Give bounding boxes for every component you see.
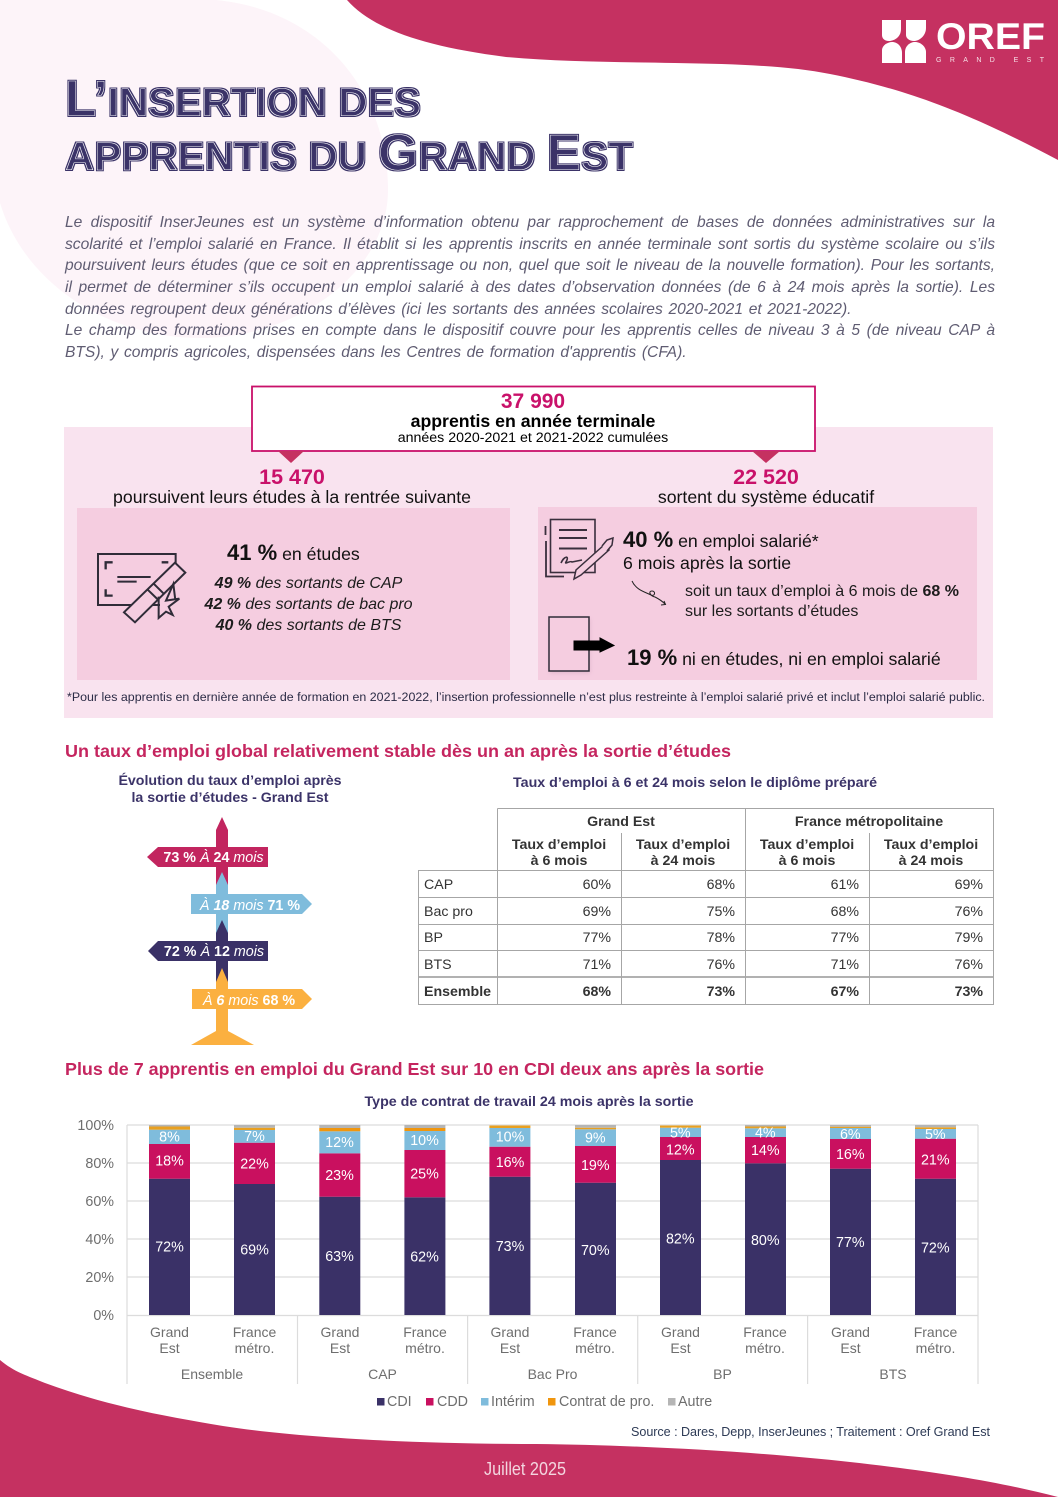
table row: CAP: 60% [583, 877, 611, 893]
intro text block: scolarité et l’emploi salarié en France. Il établit si les apprentis inscrits en année terminale sont sortis du système scolaire ou s’ils [65, 236, 995, 253]
y axis labels: 40% [85, 1232, 114, 1248]
y axis labels: 100% [77, 1118, 114, 1134]
title: L’INSERTION DES [65, 70, 421, 127]
bar: Bac Pro Grand Est [489, 1126, 530, 1315]
callout: total apprentices: 37 990 [501, 390, 565, 413]
y axis labels [77, 1118, 114, 1324]
chart title: signpost: Évolution du taux d’emploi après [118, 772, 342, 789]
bar: BP Grand Est [660, 1126, 701, 1315]
bar: CAP France: 62% [410, 1250, 439, 1266]
table title: Taux d’emploi à 6 et 24 mois selon le diplôme préparé [513, 774, 877, 790]
intro text block: il permet de déterminer s’ils occupent un emploi salarié à des dates d’observation données (de 6 à 24 mois après la sortie). Les [65, 279, 995, 296]
sign labels: À 18 mois 71 % [199, 897, 300, 914]
table row: BTS: 71% [583, 957, 611, 973]
chart title: signpost [118, 772, 342, 806]
x axis labels: areas: Grand [831, 1324, 870, 1340]
table: employment rate by diploma [418, 808, 994, 1004]
bar: CAP Grand Est [319, 1125, 360, 1315]
x axis labels: areas: France [914, 1324, 957, 1340]
x axis labels: areas: Grand [150, 1324, 189, 1340]
table row: BP: 77% [583, 930, 611, 946]
sign labels: 73 % À 24 mois [163, 849, 264, 866]
bar: CAP France [404, 1125, 445, 1315]
bar: Ensemble France: 7% [244, 1129, 265, 1145]
bar: BP Grand Est: 12% [666, 1142, 695, 1158]
table row: Ensemble: Ensemble [424, 984, 491, 1000]
x axis labels: areas: Grand [321, 1324, 359, 1340]
panel: key figures [64, 386, 993, 718]
table header: à 6 mois [779, 853, 835, 869]
table row: Bac pro: 69% [583, 904, 611, 920]
legend: CDD [437, 1394, 468, 1410]
arrow: curved doodle [632, 581, 666, 605]
figure: 22 520 [658, 465, 874, 507]
bar: Ensemble Grand Est: 72% [155, 1240, 184, 1256]
x axis labels: diploma groups [181, 1366, 907, 1382]
table row: Bac pro [424, 904, 983, 920]
bar: Bac Pro France: 19% [581, 1158, 610, 1174]
table row: BTS: 76% [707, 957, 735, 973]
legend [377, 1394, 712, 1410]
bar: CAP Grand Est: 12% [325, 1135, 354, 1151]
table header: Taux d’emploi [884, 837, 978, 853]
x axis labels: diploma groups: Ensemble [181, 1366, 243, 1382]
figure: 15 470: poursuivent leurs études à la rentrée suivante [113, 487, 471, 507]
bar: CAP France: 10% [410, 1133, 439, 1149]
table row: BP: 77% [831, 930, 859, 946]
y axis labels: 60% [85, 1194, 114, 1210]
y axis labels: 20% [85, 1270, 114, 1286]
footnote: *Pour les apprentis en dernière année de formation en 2021-2022, l’insertion professionnelle n’est plus restreinte à l’emploi salarié privé et inclut l’emploi salarié public. [67, 690, 985, 704]
x axis labels: areas: France [233, 1324, 276, 1340]
heading: stable employment rate: Un taux d’emploi global relativement stable dès un an après la sortie d’études [65, 741, 731, 761]
table row: Bac pro: 76% [955, 904, 983, 920]
pole: 6 months [191, 968, 312, 1045]
figure: 22 520: 22 520 [733, 465, 799, 489]
text: employment rate note: sur les sortants d’études [685, 603, 858, 620]
panel background [64, 427, 993, 718]
table header [512, 814, 978, 869]
y axis labels: 80% [85, 1156, 114, 1172]
bar: Bac Pro France [575, 1125, 616, 1315]
table row: BP: BP [424, 930, 443, 946]
x axis labels: areas: Est [159, 1340, 180, 1356]
x axis labels: areas: métro. [235, 1340, 274, 1356]
bar: CAP Grand Est: 23% [325, 1168, 354, 1184]
bar: Bac Pro Grand Est: 73% [496, 1239, 525, 1255]
bar: BTS Grand Est [830, 1125, 871, 1315]
x axis labels: areas: Grand [661, 1324, 700, 1340]
text: employment rate note: soit un taux d’emploi à 6 mois de 68 % [685, 583, 959, 600]
icon: diploma [98, 554, 185, 622]
bar: BTS France: 21% [921, 1152, 950, 1168]
panel: continuing studies [77, 508, 510, 680]
table row: BTS [424, 957, 983, 973]
table header: à 6 mois [531, 853, 587, 869]
figure: 15 470: 15 470 [259, 465, 325, 489]
legend: Intérim [491, 1394, 535, 1410]
x axis labels: areas: Grand [491, 1324, 529, 1340]
table row: Ensemble: 73% [955, 984, 983, 1000]
background shape: top right crimson wave [347, 0, 1058, 160]
sign labels: À 6 mois 68 % [202, 992, 295, 1009]
table header: à 24 mois [651, 853, 715, 869]
intro text block: Le champ des formations prises en compte dans le dispositif couvre pour les apprentis celles de niveau 3 à 5 (de niveau CAP à [65, 322, 995, 339]
table header: Taux d’emploi [760, 837, 854, 853]
sign labels [163, 849, 300, 1009]
table row: BTS: 76% [955, 957, 983, 973]
table row: BP [424, 930, 983, 946]
table row: CAP: 68% [707, 877, 735, 893]
table header: Grand Est [587, 814, 655, 830]
table row: Bac pro: Bac pro [424, 904, 473, 920]
text: breakdown by diploma: 49 % des sortants de CAP [214, 575, 403, 592]
pole: 12 months [148, 920, 268, 982]
text: breakdown by diploma: 40 % des sortants de BTS [215, 617, 402, 634]
x axis labels: areas: métro. [745, 1340, 785, 1356]
x axis labels: areas: France [743, 1324, 787, 1340]
bar: BTS France: 5% [925, 1127, 946, 1143]
bar: BP Grand Est: 82% [666, 1231, 695, 1247]
table row: BP: 78% [707, 930, 735, 946]
bar: Bac Pro Grand Est: 10% [496, 1130, 525, 1146]
x axis labels: diploma groups: BP [713, 1366, 732, 1382]
arrow: to leaving education [752, 451, 780, 463]
x axis labels: diploma groups: Bac Pro [528, 1366, 578, 1382]
table row: CAP: 61% [831, 877, 859, 893]
table row: Ensemble: 73% [707, 984, 735, 1000]
figure: 22 520: sortent du système éducatif [658, 487, 874, 507]
x axis labels: areas: Est [670, 1340, 691, 1356]
text: 40 % employed [623, 527, 819, 573]
text: 40 % employed: 6 mois après la sortie [623, 553, 791, 573]
panel: leaving education [538, 507, 977, 680]
chart title: signpost: la sortie d’études - Grand Est [131, 790, 329, 806]
table row: BP: 79% [955, 930, 983, 946]
table row: CAP: CAP [424, 877, 453, 893]
background blob: pale pink [0, 0, 388, 338]
table row: Bac pro: 75% [707, 904, 735, 920]
intro text block: données regroupent deux générations d’élèves (ici les sortants des années scolaires 2020-2021 et 2021-2022). [65, 301, 851, 318]
bar: Bac Pro Grand Est: 16% [496, 1155, 525, 1171]
bar: BP France: 14% [751, 1143, 780, 1159]
background shape: bottom crimson wave [0, 1360, 1058, 1497]
bar: CAP France: 25% [410, 1166, 439, 1182]
sign labels: 72 % À 12 mois [164, 943, 264, 960]
bar: BTS France [915, 1125, 956, 1315]
logo wordmark: OREF [936, 16, 1045, 57]
y axis labels: 0% [93, 1308, 114, 1324]
icon: logo petals [882, 20, 926, 63]
bar: BTS France: 72% [921, 1240, 950, 1256]
bar: Bac Pro France: 70% [581, 1243, 610, 1259]
chart title: contract type: Type de contrat de travail 24 mois après la sortie [364, 1093, 694, 1109]
bar: BP France: 80% [751, 1233, 780, 1249]
legend: CDI [387, 1394, 412, 1410]
callout: total apprentices: années 2020-2021 et 2021-2022 cumulées [398, 430, 668, 446]
bar: BTS Grand Est: 6% [840, 1127, 861, 1143]
bar: Ensemble Grand Est: 8% [159, 1130, 180, 1146]
logo: OREF Grand Est [882, 16, 1045, 64]
x axis labels: areas: Est [330, 1340, 350, 1356]
legend: Contrat de pro. [559, 1394, 654, 1410]
table header: Taux d’emploi [636, 837, 730, 853]
table header: Taux d’emploi [512, 837, 606, 853]
x axis labels: areas: métro. [405, 1340, 445, 1356]
source: Source : Dares, Depp, InserJeunes ; Traitement : Oref Grand Est [631, 1425, 990, 1439]
text: 41 % in studies: 41 % en études [227, 540, 360, 565]
x axis labels: diploma groups: CAP [368, 1366, 397, 1382]
bar: Ensemble Grand Est: 18% [155, 1154, 184, 1170]
text: employment rate note [685, 583, 959, 620]
x axis labels: areas [150, 1324, 957, 1356]
table row: BTS: 71% [831, 957, 859, 973]
bar: Ensemble France: 22% [240, 1156, 269, 1172]
table row: CAP: 69% [955, 877, 983, 893]
callout: total apprentices [252, 386, 815, 451]
table row: CAP [424, 877, 983, 893]
x axis labels: areas: métro. [575, 1340, 615, 1356]
callout: total apprentices: apprentis en année terminale [411, 411, 656, 431]
x axis labels: areas: Est [840, 1340, 861, 1356]
bar: BTS Grand Est: 77% [836, 1235, 865, 1251]
table row: Ensemble: 67% [831, 984, 859, 1000]
table row: Ensemble: 68% [583, 984, 611, 1000]
x axis labels: areas: France [573, 1324, 617, 1340]
table row: Ensemble [424, 984, 983, 1000]
intro text block [64, 214, 995, 361]
x axis labels: areas: métro. [916, 1340, 955, 1356]
legend: Autre [678, 1394, 712, 1410]
text: 40 % employed: 40 % en emploi salarié* [623, 527, 819, 552]
title: APPRENTIS DU GRAND EST [65, 124, 633, 181]
pole: 18 months [191, 872, 312, 935]
bar: BP France [745, 1125, 786, 1315]
x axis labels: diploma groups: BTS [879, 1366, 907, 1382]
logo subtitle: GRAND EST [936, 57, 1045, 64]
text: 19 % neither: 19 % ni en études, ni en emploi salarié [627, 645, 941, 670]
table row: Bac pro: 68% [831, 904, 859, 920]
intro text block: Le dispositif InserJeunes est un système d’information obtenu par rapprochement de bases de données administratives sur la [65, 214, 995, 231]
arrow: to continuing studies [278, 451, 304, 463]
title [65, 70, 633, 181]
intro text block: BTS), y compris agricoles, dispensées dans les Centres de formation d'apprentis (CFA). [65, 344, 687, 361]
figure: 15 470 [113, 465, 471, 507]
stacked bar chart: contract type [77, 1118, 978, 1410]
icon: signed contract [546, 520, 613, 579]
bar: BP France: 4% [755, 1126, 776, 1142]
intro text block: poursuivent leurs études (que ce soit en apprentissage ou non, quel que soit le niveau de la nouvelle formation). Pour les sortants, [65, 257, 995, 274]
x axis labels: areas: France [403, 1324, 447, 1340]
table header: France métropolitaine [795, 814, 943, 830]
bar: Bac Pro France: 9% [585, 1131, 606, 1147]
signpost chart: employment rate over time [147, 817, 312, 1045]
text: breakdown by diploma: 42 % des sortants de bac pro [203, 596, 413, 613]
bar: Ensemble France: 69% [240, 1242, 269, 1258]
heading: CDI share: Plus de 7 apprentis en emploi du Grand Est sur 10 en CDI deux ans après la sortie [65, 1059, 764, 1079]
bar: Ensemble France [234, 1125, 275, 1315]
bar: BTS Grand Est: 16% [836, 1147, 865, 1163]
icon: exit document with arrow [549, 617, 614, 673]
x axis labels: areas: Est [500, 1340, 520, 1356]
table row: BTS: BTS [424, 957, 452, 973]
text: breakdown by diploma [203, 575, 413, 634]
bar: Ensemble Grand Est [149, 1125, 190, 1315]
table header: à 24 mois [899, 853, 963, 869]
date: Juillet 2025 [484, 1459, 566, 1479]
bar: CAP Grand Est: 63% [325, 1249, 354, 1265]
bar: BP Grand Est: 5% [670, 1126, 691, 1142]
pole: 24 months [147, 817, 268, 888]
